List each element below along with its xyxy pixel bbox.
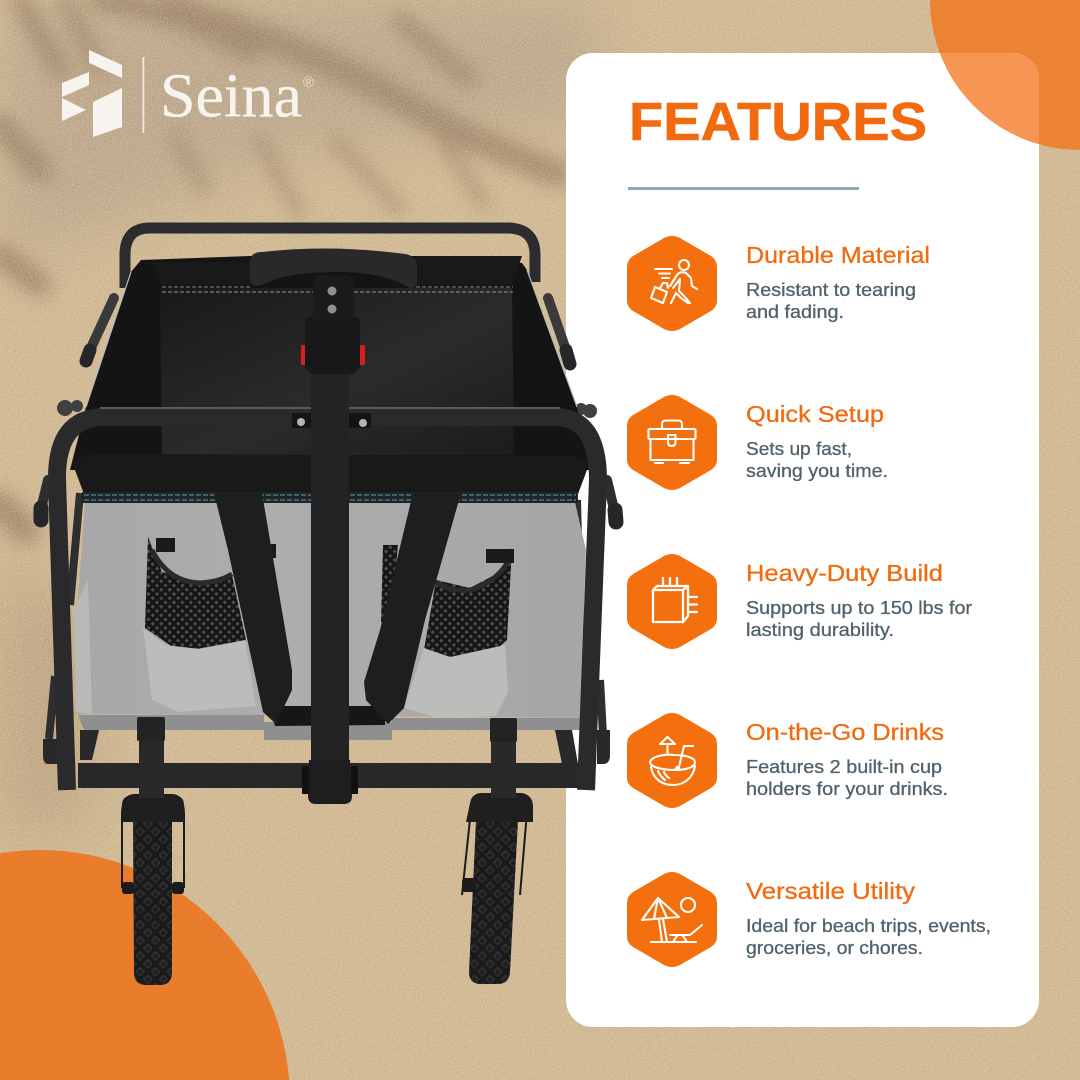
panel: features [566, 53, 1039, 1027]
rolled top cloth [72, 454, 590, 503]
description: lasting durability. [746, 620, 894, 640]
feature: quick setup [627, 395, 888, 490]
bottom axle [78, 763, 578, 788]
logo wordmark: Seina [160, 62, 302, 130]
title: Quick Setup [746, 401, 884, 427]
front wheel: left [122, 717, 184, 985]
description: Features 2 built-in cup [746, 757, 942, 777]
feature: versatile utility [627, 872, 991, 967]
title: On-the-Go Drinks [746, 719, 944, 745]
description: holders for your drinks. [746, 779, 948, 799]
icon: reinforced block [627, 554, 717, 649]
feature: durable material [627, 236, 930, 331]
feature: heavy-duty build [627, 554, 972, 649]
heading: FEATURES [629, 92, 927, 152]
icon: toolbox [627, 395, 717, 490]
carry straps [214, 493, 461, 724]
orange circle: bottom left [0, 850, 289, 1080]
title: Durable Material [746, 242, 930, 268]
handle connector [313, 275, 354, 320]
icon: coconut drink [627, 713, 717, 808]
description: and fading. [746, 302, 844, 322]
description [746, 439, 888, 481]
orange circle: top right [930, 0, 1080, 150]
description: Sets up fast, [746, 439, 852, 459]
panel corner tint [940, 53, 1039, 144]
description [746, 280, 916, 322]
side arm rests [41, 298, 616, 522]
cup holder: left [143, 537, 276, 712]
icon: running person with bag [627, 236, 717, 331]
icon: beach umbrella and lounger [627, 872, 717, 967]
cup holder: right [381, 545, 514, 718]
description: Ideal for beach trips, events, [746, 916, 991, 936]
grey fabric body [76, 502, 586, 718]
rear struts [43, 730, 610, 764]
side knobs [57, 400, 597, 418]
registered mark: ® [303, 74, 314, 91]
description: Supports up to 150 lbs for [746, 598, 972, 618]
description [746, 598, 972, 640]
fabric side fold [74, 580, 92, 714]
wagon interior [70, 256, 590, 470]
frame brackets [292, 413, 371, 428]
title: Heavy-Duty Build [746, 560, 943, 586]
T-handle grip [250, 248, 417, 288]
title: Versatile Utility [746, 878, 916, 904]
description [746, 916, 991, 958]
feature: on-the-go drinks [627, 713, 948, 808]
side struts [49, 493, 603, 739]
bottom strap band [270, 706, 385, 726]
description [746, 757, 948, 799]
description: saving you time. [746, 461, 888, 481]
description: Resistant to tearing [746, 280, 916, 300]
front frame [57, 417, 598, 790]
red release tabs [301, 345, 365, 365]
fabric base strip [78, 715, 580, 740]
pole collar [305, 317, 360, 374]
wagon photo illustration [41, 228, 616, 985]
description: groceries, or chores. [746, 938, 923, 958]
rear handle bar [125, 228, 535, 288]
logo mark [62, 50, 122, 137]
logo: Seina [62, 50, 314, 137]
centre pole [302, 370, 358, 804]
front wheel: right [462, 718, 533, 984]
